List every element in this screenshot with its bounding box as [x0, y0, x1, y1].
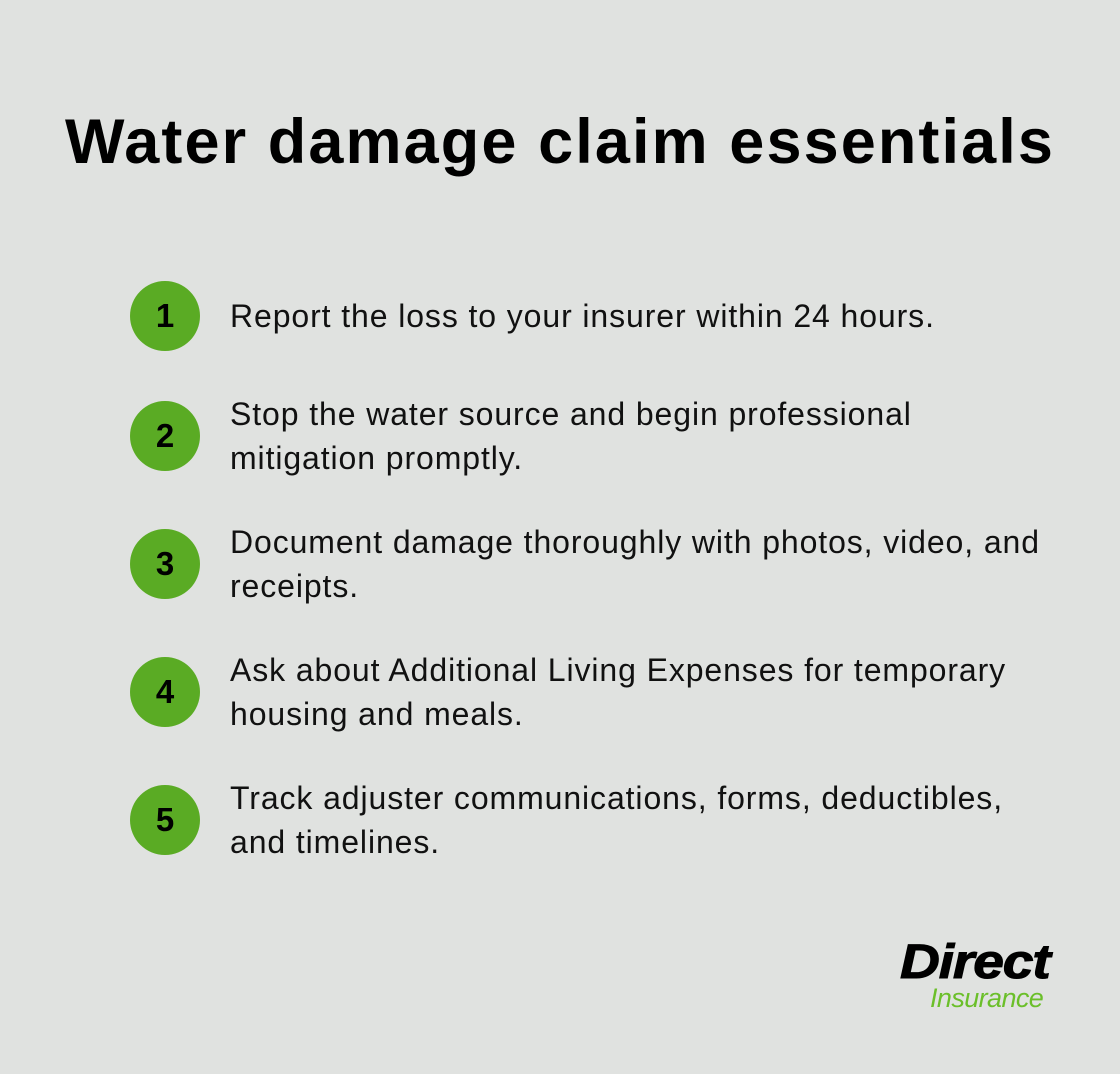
text 5 [230, 780, 1003, 860]
text 2: Stop the water source and begin professional [230, 396, 912, 432]
item 4 [130, 652, 1006, 732]
badge 3 [130, 529, 200, 599]
logo [900, 936, 1054, 1013]
item 1 [130, 281, 935, 351]
logo: Direct [900, 936, 1050, 989]
text 5: and timelines. [230, 824, 440, 860]
text 2: mitigation promptly. [230, 440, 523, 476]
badge 2 [130, 401, 200, 471]
badge 1: 1 [156, 297, 174, 334]
text 3: receipts. [230, 568, 359, 604]
badge 4 [130, 657, 200, 727]
text 4: Ask about Additional Living Expenses for temporary [230, 652, 1006, 688]
text 5: Track adjuster communications, forms, deductibles, [230, 780, 1003, 816]
text 4 [230, 652, 1006, 732]
text 2 [230, 396, 912, 476]
item 3 [130, 524, 1040, 604]
text 4: housing and meals. [230, 696, 524, 732]
item 5 [130, 780, 1003, 860]
badge 5: 5 [156, 801, 174, 838]
badge 1 [130, 281, 200, 351]
badge 2: 2 [156, 417, 174, 454]
title: Water damage claim essentials [65, 107, 1055, 177]
text 3 [230, 524, 1040, 604]
text 1: Report the loss to your insurer within 24 hours. [230, 298, 935, 334]
badge 4: 4 [156, 673, 174, 710]
item 2 [130, 396, 912, 476]
logo: Insurance [930, 983, 1043, 1013]
badge 5 [130, 785, 200, 855]
text 3: Document damage thoroughly with photos, video, and [230, 524, 1040, 560]
badge 3: 3 [156, 545, 174, 582]
